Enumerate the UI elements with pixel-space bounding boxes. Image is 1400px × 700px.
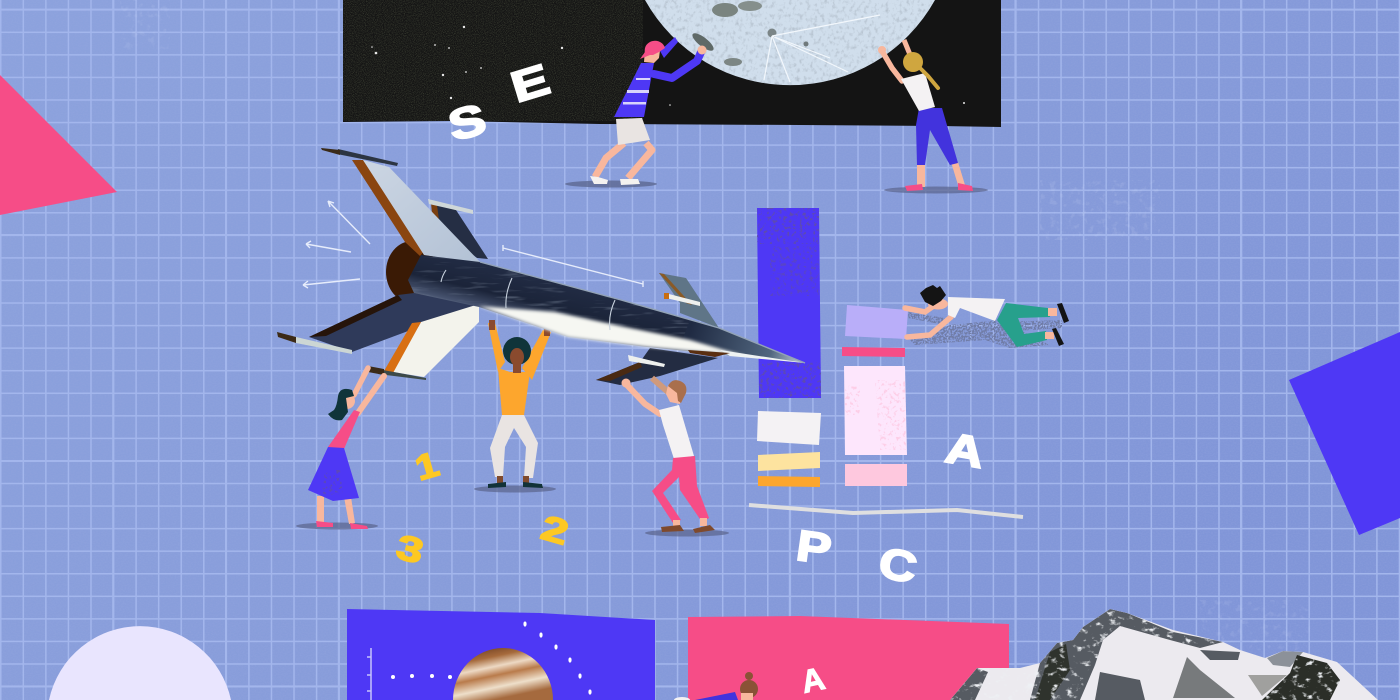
lilac circle xyxy=(49,626,231,700)
ground shadow speckle xyxy=(908,312,1062,348)
rocket upper nose fin xyxy=(659,273,719,328)
letters: S E xyxy=(444,55,555,150)
rocket top wing xyxy=(321,148,482,264)
panel: pink card: A xyxy=(798,660,828,700)
rocket lower left wing xyxy=(277,293,478,354)
person: centre figure lifting rocket xyxy=(474,320,556,492)
person: man lifting nose fin xyxy=(622,378,729,536)
dotted orbit xyxy=(391,621,592,695)
numbers: 1 2 3: 3 xyxy=(393,526,428,571)
rock faces xyxy=(950,609,1240,700)
numbers: 1 2 3 xyxy=(393,444,573,571)
panel: Jupiter on blue xyxy=(347,609,655,700)
letters: S E: E xyxy=(505,55,555,112)
person: partly visible figure xyxy=(674,672,758,700)
letters: S E: S xyxy=(444,95,491,150)
letters: A P C: A xyxy=(942,424,988,478)
panel: pink card xyxy=(674,616,1009,700)
stars xyxy=(371,26,965,106)
person: flying figure pushing block xyxy=(905,285,1069,348)
person: woman lifting wing xyxy=(296,368,384,530)
axis ruler xyxy=(367,648,371,700)
rocket lower nose fin xyxy=(596,348,718,385)
chart baseline stroke xyxy=(749,505,1023,517)
letters: A P C: C xyxy=(875,539,921,593)
panel: night sky with moon xyxy=(343,0,1001,127)
pink triangle xyxy=(0,75,117,215)
chart: left stacked bars xyxy=(757,208,821,487)
rocket fuselage xyxy=(408,255,805,363)
letters: A P C xyxy=(793,424,988,593)
rocket white lower wing xyxy=(368,304,479,380)
motion arrows xyxy=(303,201,643,288)
rocket nozzle xyxy=(386,241,438,303)
blue square xyxy=(1289,332,1400,535)
numbers: 1 2 3: 2 xyxy=(537,507,573,552)
person: man pushing moon xyxy=(565,37,706,188)
Jupiter xyxy=(453,648,553,700)
numbers: 1 2 3: 1 xyxy=(411,444,443,488)
snowy mountain xyxy=(950,609,1378,700)
letters: A P C: P xyxy=(793,522,834,574)
moon xyxy=(640,0,940,90)
rocket xyxy=(277,148,805,385)
rock texture xyxy=(950,609,1340,700)
person: woman pushing moon xyxy=(878,40,988,194)
chart: right stacked bars xyxy=(842,305,908,486)
rocket rear fin xyxy=(428,199,488,259)
